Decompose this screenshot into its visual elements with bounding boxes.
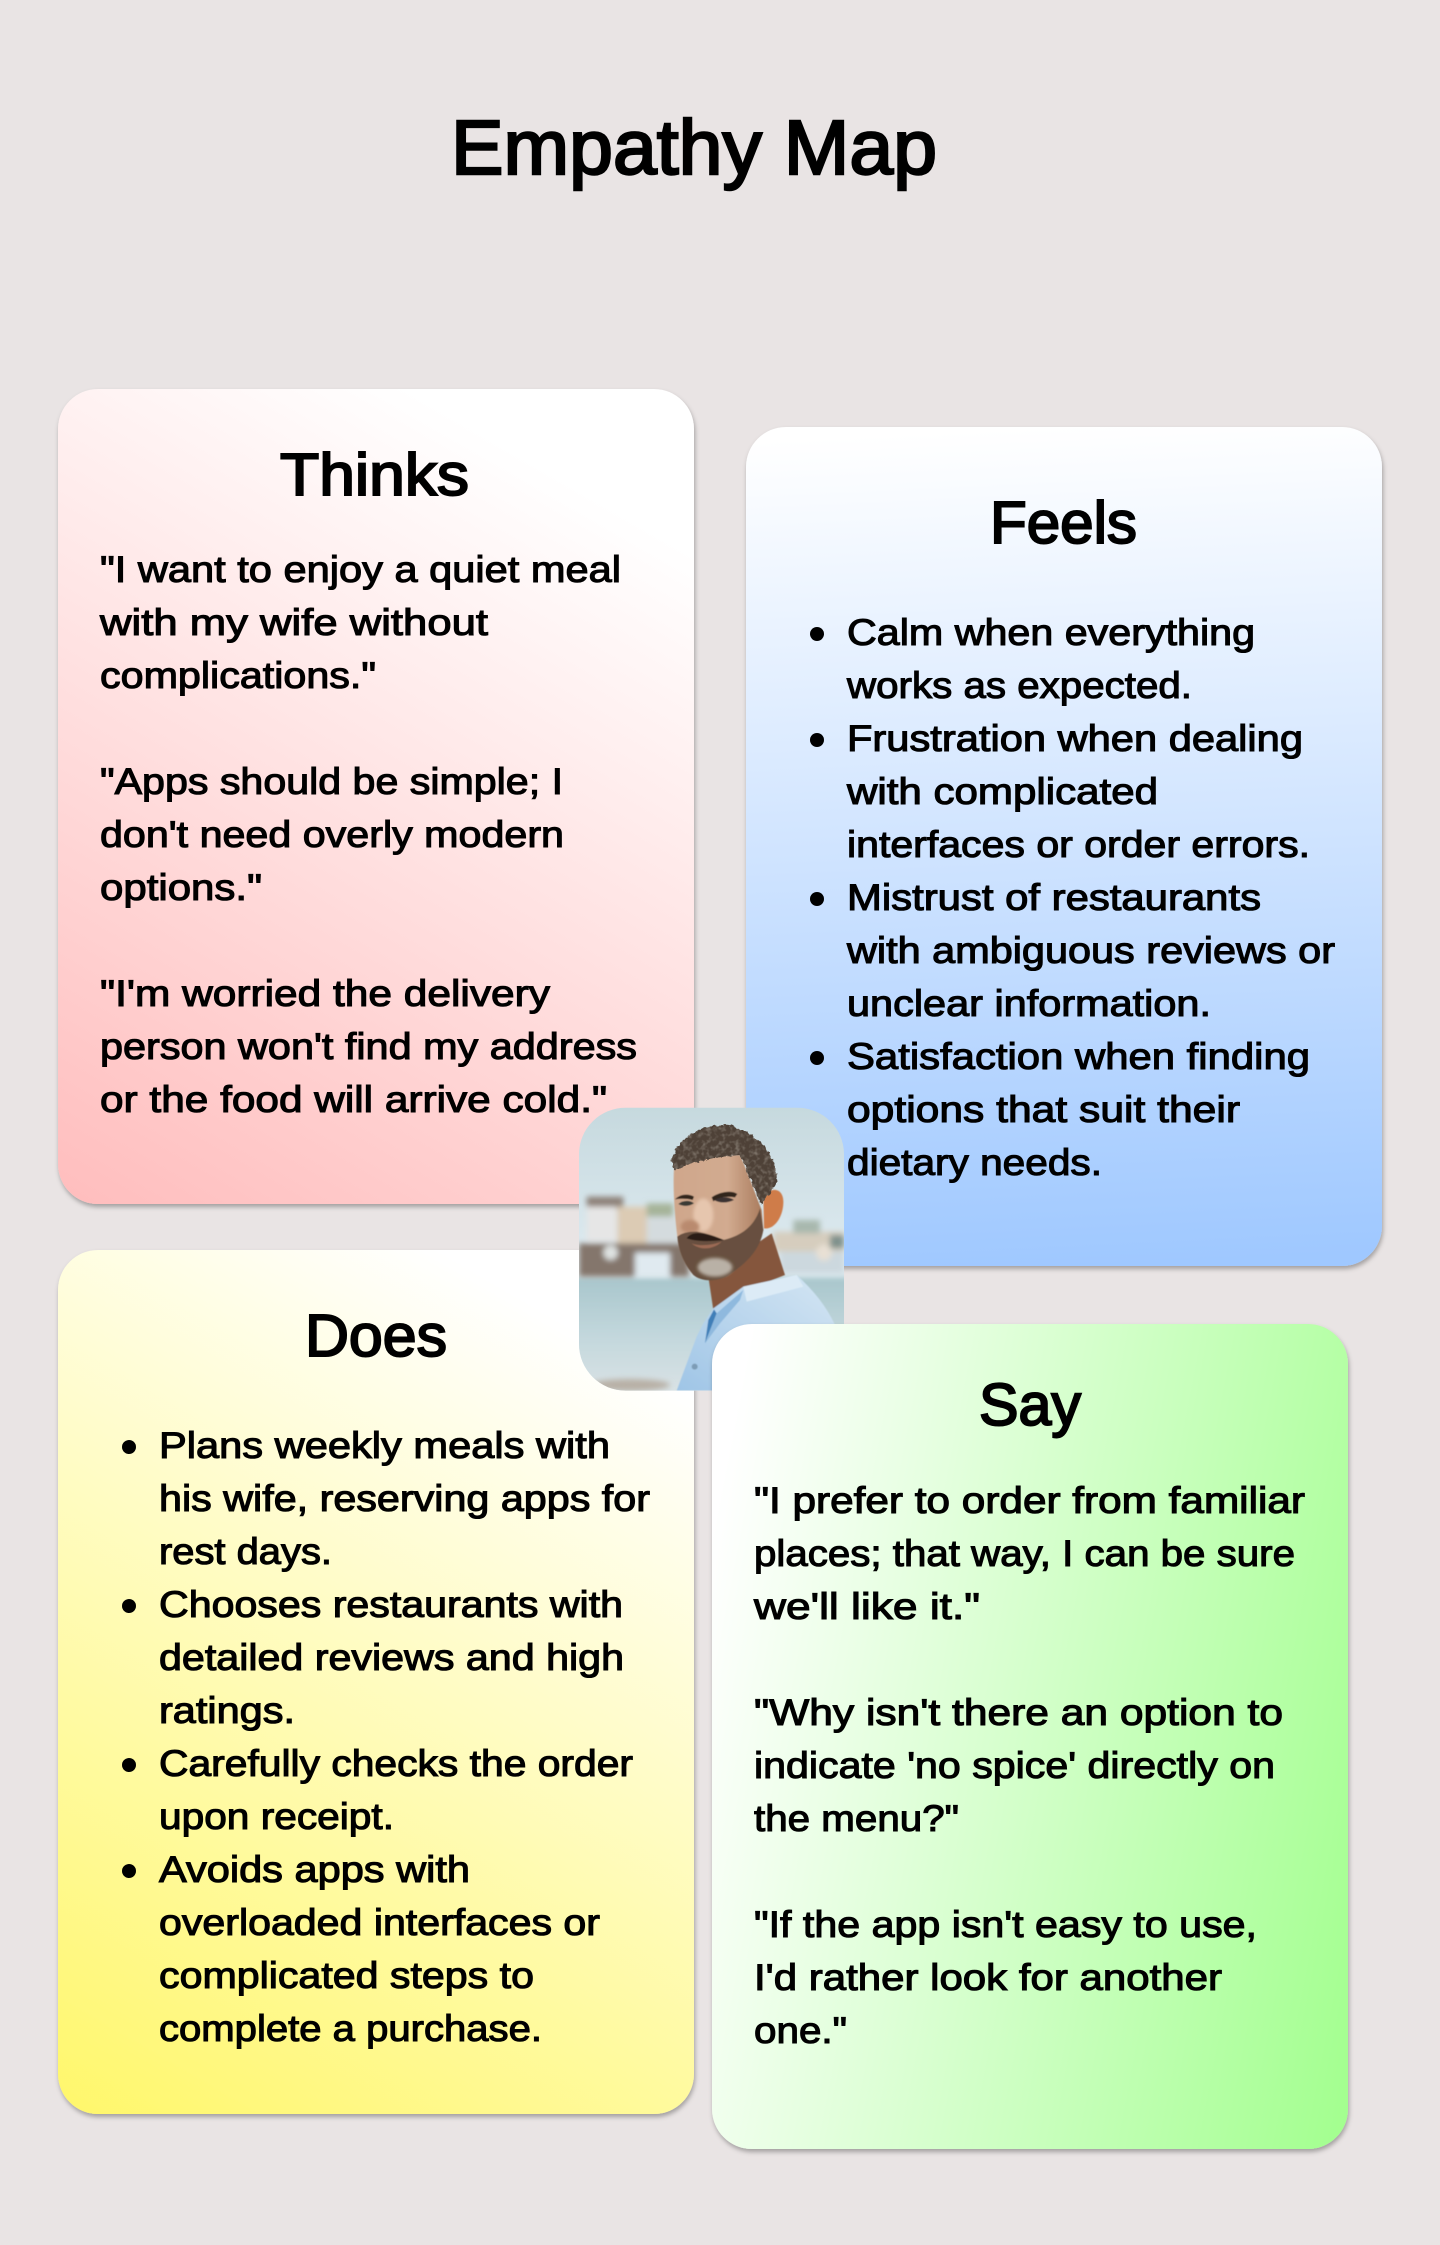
heading: say: Say bbox=[979, 1372, 1081, 1438]
text block: say quotes: I'd rather look for another bbox=[754, 1957, 1222, 1998]
bullet list: does: Avoids apps with bbox=[159, 1849, 470, 1890]
text block: say quotes: one." bbox=[754, 2010, 847, 2051]
bullet list: feels: Calm when everything bbox=[847, 612, 1255, 653]
bullet list: feels: interfaces or order errors. bbox=[847, 824, 1310, 865]
bullet list: does: detailed reviews and high bbox=[159, 1637, 624, 1678]
bullet list: does: Plans weekly meals with bbox=[159, 1425, 610, 1466]
text block: thinks quotes: options." bbox=[100, 867, 262, 908]
bullet list: does: Carefully checks the order bbox=[159, 1743, 633, 1784]
text block: thinks quotes: with my wife without bbox=[99, 602, 489, 643]
title: Empathy Map bbox=[451, 105, 937, 191]
text block: thinks quotes: "I want to enjoy a quiet meal bbox=[100, 549, 621, 590]
text block: say quotes: "Why isn't there an option to bbox=[754, 1692, 1283, 1733]
text block: thinks quotes: "Apps should be simple; I bbox=[100, 761, 563, 802]
text block: say quotes: the menu?" bbox=[754, 1798, 959, 1839]
heading: feels: Feels bbox=[990, 490, 1137, 556]
text block: say quotes: indicate 'no spice' directly on bbox=[754, 1745, 1275, 1786]
bullet list: does: upon receipt. bbox=[159, 1796, 394, 1837]
text block: thinks quotes: or the food will arrive cold." bbox=[100, 1079, 607, 1120]
bullet list: does: ratings. bbox=[159, 1690, 295, 1731]
bullet list: feels: with complicated bbox=[846, 771, 1158, 812]
bullet list: feels: Satisfaction when finding bbox=[847, 1036, 1310, 1077]
photo: man portrait bbox=[570, 1108, 853, 1401]
bullet list: does: complete a purchase. bbox=[159, 2008, 542, 2049]
panel: does bbox=[58, 1250, 694, 2114]
bullet list: feels: with ambiguous reviews or bbox=[846, 930, 1335, 971]
heading: thinks: Thinks bbox=[280, 442, 469, 508]
text block: say quotes: we'll like it." bbox=[753, 1586, 980, 1627]
text block: say quotes bbox=[753, 1480, 1305, 2051]
panel: feels bbox=[746, 427, 1382, 1266]
text block: thinks quotes bbox=[99, 549, 637, 1120]
bullet list: feels bbox=[810, 612, 1335, 1183]
text block: say quotes: "I prefer to order from familiar bbox=[754, 1480, 1305, 1521]
bullet list: feels: dietary needs. bbox=[847, 1142, 1102, 1183]
bullet list: does bbox=[122, 1425, 650, 2049]
text block: say quotes: places; that way, I can be sure bbox=[754, 1533, 1295, 1574]
bullet list: feels: Frustration when dealing bbox=[847, 718, 1303, 759]
panel: say bbox=[712, 1324, 1348, 2149]
bullet list: does: overloaded interfaces or bbox=[159, 1902, 600, 1943]
text block: say quotes: "If the app isn't easy to use, bbox=[754, 1904, 1257, 1945]
bullet list: feels: options that suit their bbox=[847, 1089, 1240, 1130]
bullet list: feels: works as expected. bbox=[846, 665, 1192, 706]
bullet list: feels: Mistrust of restaurants bbox=[847, 877, 1261, 918]
bullet list: does: rest days. bbox=[159, 1531, 332, 1572]
bullet list: does: complicated steps to bbox=[159, 1955, 534, 1996]
text block: thinks quotes: person won't find my address bbox=[100, 1026, 637, 1067]
bullet list: feels: unclear information. bbox=[847, 983, 1211, 1024]
text block: thinks quotes: "I'm worried the delivery bbox=[100, 973, 551, 1014]
panel: thinks bbox=[58, 389, 694, 1204]
bullet list: does: his wife, reserving apps for bbox=[159, 1478, 650, 1519]
text block: thinks quotes: complications." bbox=[100, 655, 376, 696]
heading: does: Does bbox=[305, 1303, 447, 1369]
text block: thinks quotes: don't need overly modern bbox=[100, 814, 564, 855]
bullet list: does: Chooses restaurants with bbox=[159, 1584, 623, 1625]
